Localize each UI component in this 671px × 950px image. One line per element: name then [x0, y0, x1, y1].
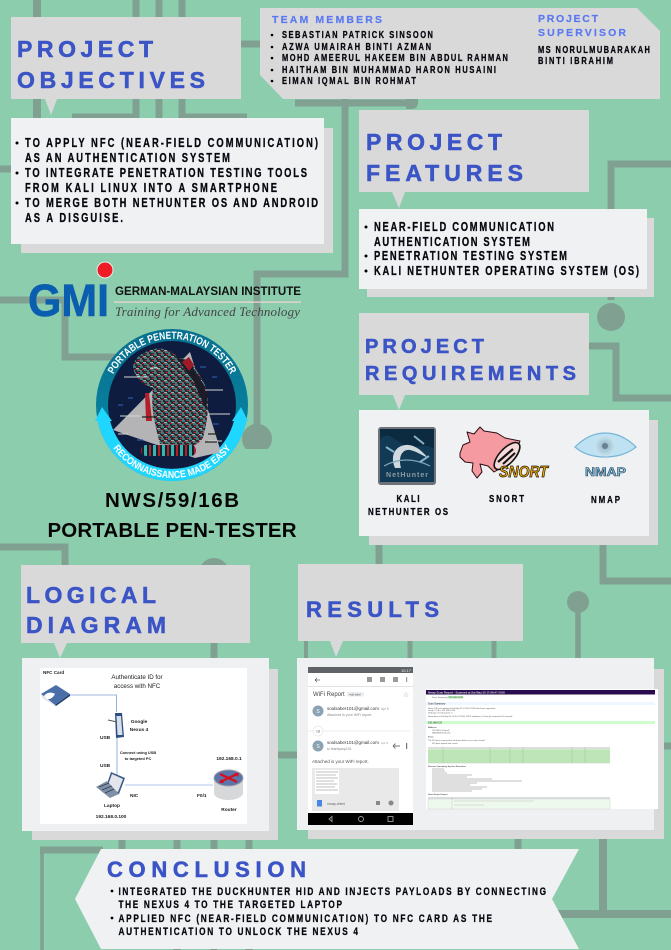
screenshot: email on phone: soulsaber101@gmail.com	[327, 740, 379, 745]
screenshot: email on phone: Attached is your WiFi report.	[327, 713, 372, 717]
badge tiger illustration	[118, 349, 230, 456]
panel: requirements	[359, 410, 658, 545]
screenshot: nmap report: Verbosity: 0; Debug level: 0	[428, 712, 453, 714]
heading: project features: FEATURES	[366, 160, 523, 186]
screenshot: nmap report: Scan Summary | 192.168.0.0/24	[432, 696, 464, 699]
screenshot: nmap report: Address	[428, 726, 438, 729]
screenshot: email on phone: Attached is your WiFi report.	[312, 759, 369, 764]
label: kali nethunter os: NETHUNTER OS	[368, 506, 448, 517]
screenshot: email on phone: 10:17	[401, 668, 412, 673]
label: kali nethunter os: KALI	[396, 493, 420, 504]
icon: snort pig	[460, 427, 549, 481]
panel: logical diagram	[22, 658, 278, 840]
screenshot: nmap report: Scan Summary	[428, 702, 446, 706]
conclusion list: THE NEXUS 4 TO THE TARGETED LAPTOP	[118, 899, 342, 911]
heading: logical diagram: LOGICAL	[26, 582, 156, 608]
diagram labels: access with NFC	[114, 683, 161, 690]
project name title: PORTABLE PEN-TESTER	[48, 519, 297, 542]
heading: logical diagram	[21, 565, 250, 658]
supervisor name: BINTI IBRAHIM	[538, 55, 613, 66]
diagram labels: F0/1	[197, 793, 207, 799]
icon: laptop	[96, 772, 125, 798]
screenshot: nmap report: nmap -T4 -A -v 192.168.0.0/24	[428, 709, 456, 712]
diagram labels: Nexus 4	[130, 727, 149, 733]
diagram labels: Google	[131, 719, 148, 725]
panel: objectives list: TO APPLY NFC (NEAR-FIELD COMMUNICATION)	[25, 137, 318, 150]
team member names: SEBASTIAN PATRICK SINSOON	[282, 29, 433, 40]
conclusion list: APPLIED NFC (NEAR-FIELD COMMUNICATION) TO NFC CARD AS THE	[118, 913, 492, 925]
project supervisor heading: PROJECT	[538, 13, 599, 25]
icon: kali nethunter: NetHunter	[386, 472, 428, 479]
supervisor name: MS NORULMUBARAKAH	[538, 44, 650, 55]
screenshot: email on phone: WiFi Report	[313, 692, 345, 698]
icon: kali nethunter	[378, 427, 436, 485]
screenshot: email on phone: 18	[316, 730, 320, 734]
diagram labels: to targeted PC	[125, 756, 151, 761]
heading: project requirements: REQUIREMENTS	[365, 363, 576, 385]
diagram labels: NFC Card	[43, 670, 64, 675]
screenshot: nmap report: Nmap Scan Report - Scanned at Sat May 20 17:08:47 2018	[428, 690, 505, 694]
logo: GMI: Training for Advanced Technology	[115, 304, 300, 319]
screenshot: email on phone: nmap.xhtml	[327, 802, 345, 806]
icon: nmap eye: NMAP	[585, 465, 626, 479]
heading: project requirements: PROJECT	[365, 336, 484, 358]
supervisor name	[538, 44, 650, 66]
panel: objectives list: TO INTEGRATE PENETRATION TESTING TOOLS	[25, 167, 307, 180]
panel: results	[297, 658, 664, 839]
team members panel	[260, 8, 660, 99]
icon: phone	[108, 713, 124, 738]
logo: GMI: GMI	[28, 275, 109, 326]
team member names: EIMAN IQMAL BIN ROHMAT	[282, 75, 417, 86]
screenshot: nmap report: 192.168.0.10	[428, 722, 443, 724]
project code title: NWS/59/16B	[105, 489, 239, 512]
panel: features list	[359, 209, 654, 297]
screenshot: nmap report	[426, 689, 658, 809]
circuit nodes	[199, 97, 625, 613]
conclusion list	[111, 886, 546, 938]
panel: objectives list	[11, 118, 333, 253]
diagram labels: Laptop	[104, 803, 120, 809]
badge top text: PORTABLE PENETRATION TESTER	[107, 332, 236, 374]
screenshot: email on phone: Apr 5	[381, 707, 389, 711]
icon: router	[214, 770, 243, 800]
screenshot: nmap report: Remote Operating System Detection	[428, 765, 467, 768]
panel: objectives list: AS A DISGUISE.	[25, 212, 123, 225]
screenshot: nmap report: Nmap done at Sat May 20 17:09:47 2018; 256 IP addresses (1 host up) scanned in 60 seconds	[428, 715, 512, 718]
label: kali nethunter os	[368, 493, 448, 517]
icon: nmap eye	[575, 433, 636, 479]
project supervisor heading: SUPERVISOR	[538, 27, 626, 39]
panel: conclusion	[75, 849, 579, 949]
diagram labels: NIC	[130, 793, 139, 799]
screenshot: email on phone: ☆	[403, 691, 409, 699]
diagram labels: 192.168.0.1	[216, 756, 242, 762]
panel: features list: AUTHENTICATION SYSTEM	[374, 236, 530, 249]
diagram labels: USB	[100, 763, 111, 769]
panel: features list: KALI NETHUNTER OPERATING SYSTEM (OS)	[374, 265, 639, 278]
panel: features list: NEAR-FIELD COMMUNICATION	[374, 221, 554, 234]
screenshot: nmap report: Nmap 7.40 was initiated at Sat May 20 17:08:47 2018 with these arguments:	[428, 707, 496, 710]
team member names: MOHD AMEERUL HAKEEM BIN ABDUL RAHMAN	[282, 52, 508, 63]
team member names: AZWA UMAIRAH BINTI AZMAN	[282, 41, 431, 52]
connection lines	[70, 695, 213, 785]
conclusion list: AUTHENTICATION TO UNLOCK THE NEXUS 4	[118, 926, 358, 938]
team members heading: TEAM MEMBERS	[272, 14, 382, 26]
icon: nfc reader	[41, 685, 70, 706]
heading: project features	[359, 110, 589, 208]
badge: portable penetration tester	[95, 329, 248, 481]
screenshot: nmap report: The 993 ports scanned but not shown below are in state: closed	[428, 739, 485, 742]
label: nmap: NMAP	[591, 494, 620, 505]
diagram labels: Authenticate ID for	[111, 674, 163, 681]
team member names: HAITHAM BIN MUHAMMAD HARON HUSAINI	[282, 64, 496, 75]
team member names	[271, 29, 508, 86]
panel: features list: PENETRATION TESTING SYSTEM	[374, 250, 567, 263]
label: snort: SNORT	[489, 493, 524, 504]
screenshot: nmap report: WIN-NEXUS4 (user)	[432, 732, 451, 734]
heading: project objectives: OBJECTIVES	[17, 67, 205, 93]
screenshot: email on phone: Add label	[349, 692, 361, 696]
screenshot: nmap report: Host Script Output	[428, 793, 448, 796]
badge cyan arc	[95, 407, 248, 481]
diagram labels: 192.168.0.100	[96, 814, 127, 820]
diagram labels: Router	[221, 807, 237, 813]
screenshot: nmap report: 993 ports replied with: resets	[432, 742, 458, 745]
screenshot: nmap report: Ports	[428, 736, 434, 738]
heading: project objectives: PROJECT	[17, 36, 153, 62]
heading: results	[298, 564, 523, 657]
heading: project features: PROJECT	[366, 129, 502, 155]
project supervisor heading	[538, 13, 626, 39]
panel: objectives list: AS AN AUTHENTICATION SYSTEM	[25, 152, 230, 165]
conclusion list: INTEGRATED THE DUCKHUNTER HID AND INJECTS PAYLOADS BY CONNECTING	[118, 886, 546, 898]
badge bottom text: RECONNAISSANCE MADE EASY	[113, 444, 230, 478]
screenshot: email on phone	[308, 667, 413, 825]
heading: results: RESULTS	[306, 597, 439, 622]
diagram labels	[43, 670, 242, 820]
heading: project objectives	[11, 17, 241, 115]
panel: objectives list: TO MERGE BOTH NETHUNTER OS AND ANDROID	[25, 197, 318, 210]
icon: snort pig: SNORT	[499, 464, 549, 481]
screenshot: nmap report: 192.168.0.10 (ipv4)	[432, 730, 450, 732]
heading: conclusion: CONCLUSION	[107, 857, 306, 882]
diagram labels: Connect using USB	[120, 750, 156, 755]
screenshot: email on phone: soulsaber101@gmail.com	[327, 706, 379, 711]
logo: GMI: GERMAN-MALAYSIAN INSTITUTE	[115, 286, 301, 298]
panel: objectives list: FROM KALI LINUX INTO A SMARTPHONE	[25, 182, 277, 195]
screenshot: email on phone: S	[316, 709, 320, 715]
logo: GMI	[28, 262, 301, 326]
heading: logical diagram: DIAGRAM	[26, 612, 166, 638]
heading: project requirements	[359, 313, 589, 410]
screenshot: email on phone: S	[316, 744, 320, 750]
screenshot: email on phone: Apr 5	[381, 741, 389, 745]
diagram labels: USB	[100, 735, 111, 741]
screenshot: email on phone: to fsantyosp101	[327, 747, 352, 751]
